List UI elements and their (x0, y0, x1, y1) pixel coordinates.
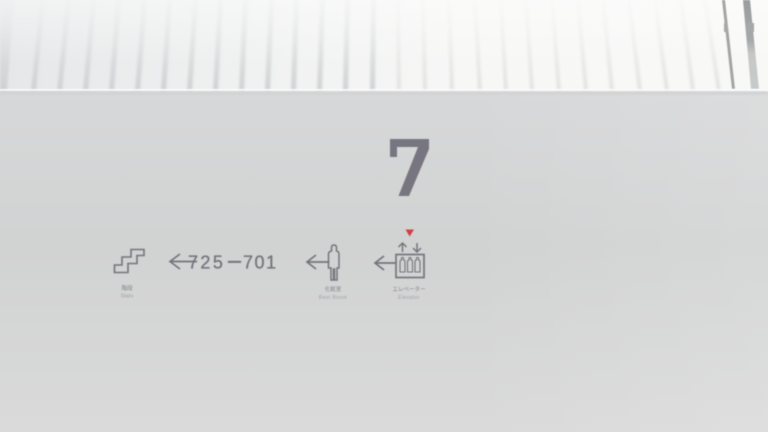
caption: elevator: Elevator (398, 295, 420, 301)
arrow: left to elevator (375, 256, 396, 270)
icon: red down triangle (406, 230, 414, 236)
caption: stairs: 階段 (121, 284, 133, 292)
icon: elevator (396, 243, 424, 278)
caption: elevator (392, 285, 426, 301)
caption: stairs: Stairs (121, 294, 134, 300)
room numbers: 725 (188, 252, 225, 272)
caption: rest room: 化粧室 (325, 285, 342, 293)
room numbers: 701 (243, 252, 278, 272)
floor number 7: 7 (409, 195, 410, 197)
arrow: left to rooms (170, 254, 197, 269)
wall (0, 92, 768, 432)
caption: rest room (319, 285, 347, 301)
caption: elevator: エレベーター (392, 285, 426, 293)
caption: rest room: Rest Room (319, 295, 347, 301)
arrow: left to rest room (307, 255, 329, 269)
caption: stairs (121, 284, 134, 300)
icon: person (328, 245, 339, 280)
floor number 7 (390, 139, 429, 197)
room numbers (188, 252, 278, 272)
icon: stairs (114, 250, 144, 272)
window blinds (0, 0, 768, 95)
